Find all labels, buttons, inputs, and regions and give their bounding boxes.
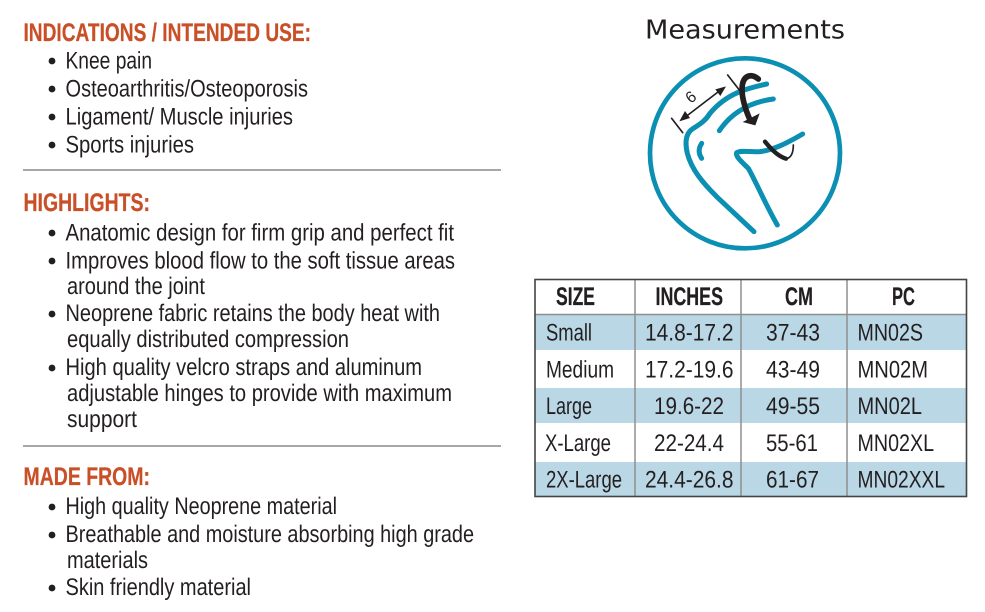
heading: indications: INDICATIONS / INTENDED USE: [24,19,311,47]
list: highlights: equally distributed compression [67,326,349,353]
list: indications: Osteoarthritis/Osteoporosis [66,76,308,102]
list: indications: Sports injuries [66,132,194,158]
list: made from: Skin friendly material [66,574,251,601]
list: indications: Knee pain [66,48,152,74]
row: large: Large [546,393,592,420]
row: x-large: MN02XL [858,430,934,457]
list: made from [49,493,474,601]
list: highlights [49,220,455,433]
table header: INCHES [656,283,723,311]
row: x-large: 22-24.4 [654,430,724,457]
row: x-large [545,430,934,457]
row: large [546,393,922,420]
row: small: Small [546,320,592,346]
list: highlights: support [67,406,137,433]
row: medium: MN02M [858,356,928,384]
panel: highlights [24,189,455,433]
list: highlights: Improves blood flow to the soft tissue areas [66,248,455,274]
row: medium: Medium [546,356,614,384]
table: size chart [535,279,967,497]
panel: made from [24,463,474,601]
list: indications [49,48,308,158]
row: large: 19.6-22 [654,393,724,420]
list: highlights: Neoprene fabric retains the body heat with [66,300,440,327]
row: 2x-large: MN02XXL [858,466,945,494]
list: made from: High quality Neoprene material [66,493,337,520]
row: x-large: 55-61 [766,430,818,457]
table header: PC [892,283,915,311]
row: 2x-large [546,466,945,494]
list: highlights: Anatomic design for firm grip and perfect fit [66,220,454,246]
table header: CM [785,283,813,311]
table header: SIZE [556,283,595,311]
heading: made from: MADE FROM: [24,463,150,491]
row: large: MN02L [858,393,922,420]
row: small: MN02S [858,320,923,346]
table header [556,283,915,311]
heading: highlights: HIGHLIGHTS: [24,189,150,217]
row: small [546,320,923,346]
list: indications: Ligament/ Muscle injuries [66,104,293,130]
row: small: 37-43 [766,320,820,346]
row: 2x-large: 24.4-26.8 [645,466,734,494]
icon: knee measurement diagram: 6 [682,87,700,107]
list: highlights: around the joint [67,273,205,300]
row: 2x-large: 61-67 [766,466,819,494]
list: highlights: adjustable hinges to provide with maximum [67,380,452,407]
row: medium: 43-49 [766,356,820,384]
panel: indications [24,19,311,158]
list: made from: Breathable and moisture absorbing high grade [66,521,474,548]
row: x-large: X-Large [545,430,611,457]
list: highlights: High quality velcro straps and aluminum [66,354,422,381]
heading: measurements: Measurements [645,16,845,46]
row: medium: 17.2-19.6 [645,356,734,384]
icon: knee measurement diagram [650,58,840,248]
row: 2x-large: 2X-Large [546,466,622,494]
row: large: 49-55 [766,393,820,420]
row: small: 14.8-17.2 [645,320,734,346]
row: medium [546,356,928,384]
list: made from: materials [67,547,148,574]
